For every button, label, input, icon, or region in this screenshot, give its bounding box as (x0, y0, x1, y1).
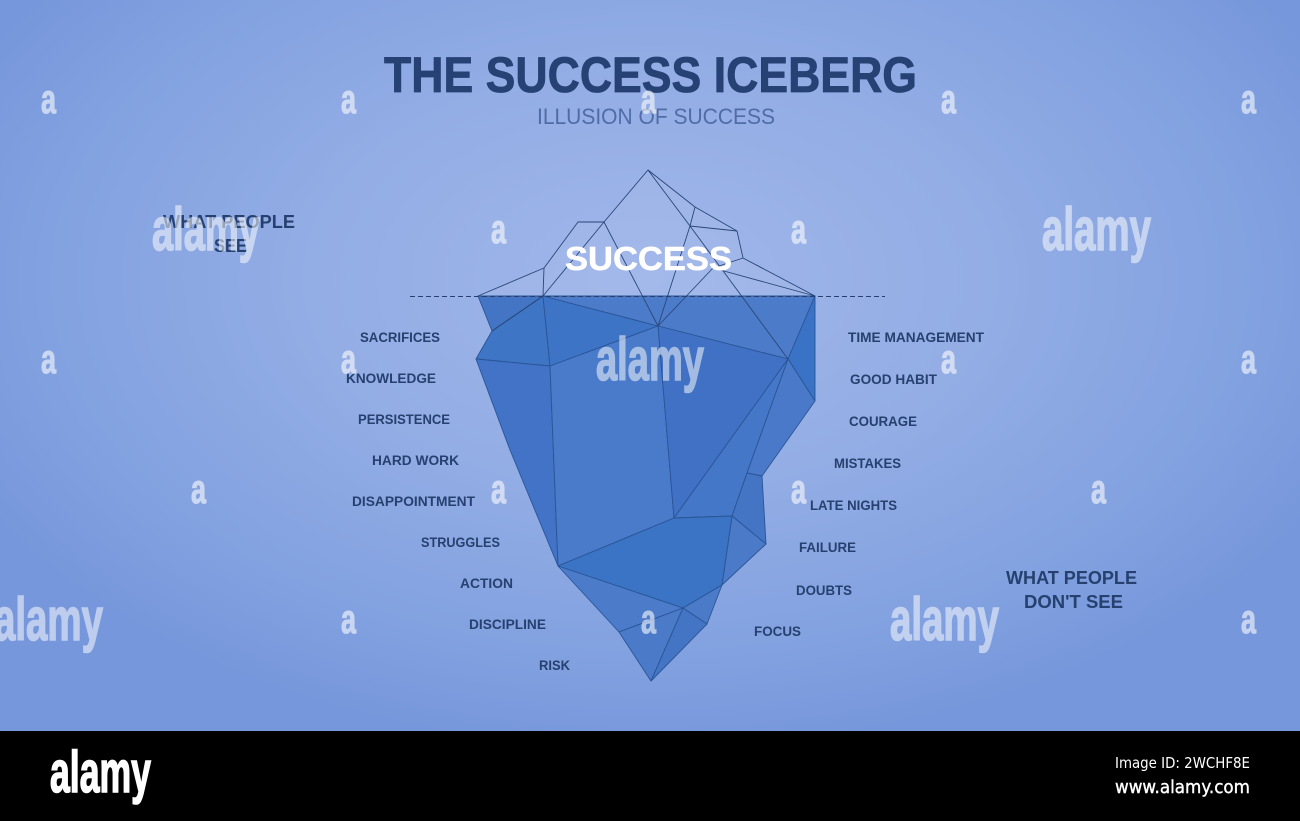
footer image id: Image ID: 2WCHF8E (1115, 754, 1250, 772)
left factor labels: ACTION (460, 576, 513, 591)
footer url: www.alamy.com (1115, 777, 1250, 798)
right factor labels: FOCUS (754, 624, 801, 639)
watermarks: small: a (341, 336, 357, 382)
watermarks: small: a (941, 336, 957, 382)
right factor labels: LATE NIGHTS (810, 498, 897, 513)
left factor labels (346, 330, 570, 673)
watermarks: small (41, 76, 1257, 642)
watermarks: small: a (1241, 596, 1257, 642)
watermarks: small: a (641, 596, 657, 642)
watermarks: large: alamy (152, 196, 260, 263)
watermarks: small: a (641, 76, 657, 122)
left factor labels: KNOWLEDGE (346, 371, 436, 386)
watermarks: large (0, 196, 1151, 653)
left factor labels: DISCIPLINE (469, 617, 546, 632)
left factor labels: HARD WORK (372, 453, 459, 468)
iceberg label: success: SUCCESS (565, 240, 732, 277)
watermarks: small: a (791, 466, 807, 512)
watermarks: large: alamy (1042, 196, 1151, 263)
heading: what people see (163, 212, 295, 256)
right factor labels: FAILURE (799, 540, 856, 555)
left factor labels: DISAPPOINTMENT (352, 494, 476, 509)
watermarks: large: alamy (890, 586, 999, 653)
iceberg diagram (476, 170, 815, 681)
watermarks: small: a (41, 336, 57, 382)
left factor labels: SACRIFICES (360, 330, 440, 345)
watermarks: small: a (1241, 336, 1257, 382)
watermarks: small: a (41, 76, 57, 122)
title: THE SUCCESS ICEBERG (384, 47, 917, 103)
iceberg underwater facets (476, 296, 815, 681)
iceberg tip above water (478, 170, 815, 296)
left factor labels: PERSISTENCE (358, 412, 450, 427)
heading: what people see: WHAT PEOPLE (163, 212, 295, 232)
right factor labels: COURAGE (849, 414, 917, 429)
left factor labels: STRUGGLES (421, 535, 500, 550)
watermarks: small: a (341, 76, 357, 122)
subtitle: ILLUSION OF SUCCESS (537, 104, 775, 129)
heading: what people don't see: WHAT PEOPLE (1006, 568, 1137, 588)
waterline (410, 296, 885, 298)
watermarks: small: a (791, 206, 807, 252)
footer logo: alamy (50, 740, 151, 805)
watermarks: small: a (491, 466, 507, 512)
watermarks: large: alamy (596, 326, 704, 393)
right factor labels: DOUBTS (796, 583, 852, 598)
right factor labels: MISTAKES (834, 456, 901, 471)
left factor labels: RISK (539, 658, 570, 673)
right factor labels (754, 330, 985, 639)
watermarks: small: a (491, 206, 507, 252)
heading: what people see: SEE (214, 236, 247, 256)
right factor labels: TIME MANAGEMENT (848, 330, 985, 345)
watermarks: small: a (1241, 76, 1257, 122)
watermarks: small: a (341, 596, 357, 642)
right factor labels: GOOD HABIT (850, 372, 938, 387)
heading: what people don't see: DON'T SEE (1024, 592, 1123, 612)
watermarks: small: a (1091, 466, 1107, 512)
iceberg wireframe lines crossing the waterline (492, 170, 815, 359)
footer bar (0, 731, 1300, 821)
watermarks: small: a (191, 466, 207, 512)
watermarks: small: a (941, 76, 957, 122)
heading: what people don't see (1006, 568, 1137, 612)
